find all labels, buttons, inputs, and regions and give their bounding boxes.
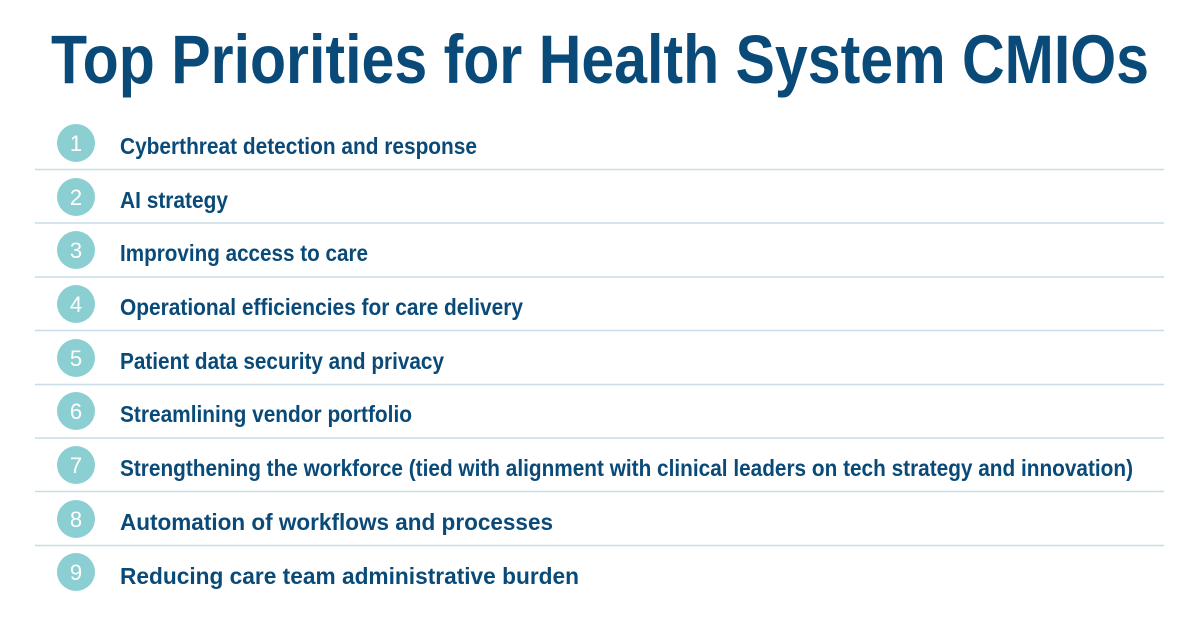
item 6: Streamlining vendor portfolio	[120, 401, 412, 427]
item 6	[57, 392, 412, 430]
item 8: 8	[70, 507, 82, 532]
item 7	[57, 446, 1133, 484]
item 2: 2	[70, 185, 82, 210]
item 5: 5	[70, 346, 82, 371]
item 5	[57, 339, 444, 377]
item 9: Reducing care team administrative burden	[120, 563, 579, 589]
item 8	[57, 500, 553, 538]
item 1: Cyberthreat detection and response	[120, 133, 477, 159]
item 4	[57, 285, 523, 323]
item 4: Operational efficiencies for care delivery	[120, 294, 523, 320]
item 8: Automation of workflows and processes	[120, 509, 553, 535]
item 5: Patient data security and privacy	[120, 348, 444, 374]
priority list	[57, 124, 1133, 591]
item 1	[57, 124, 477, 162]
item 4: 4	[70, 292, 82, 317]
item 2	[57, 178, 228, 216]
item 3: Improving access to care	[120, 240, 368, 266]
item 2: AI strategy	[120, 187, 228, 213]
item 1: 1	[70, 131, 82, 156]
item 3	[57, 231, 368, 269]
item 3: 3	[70, 238, 82, 263]
item 9: 9	[70, 560, 82, 585]
item 7: 7	[70, 453, 82, 478]
item 9	[57, 553, 579, 591]
item 6: 6	[70, 399, 82, 424]
